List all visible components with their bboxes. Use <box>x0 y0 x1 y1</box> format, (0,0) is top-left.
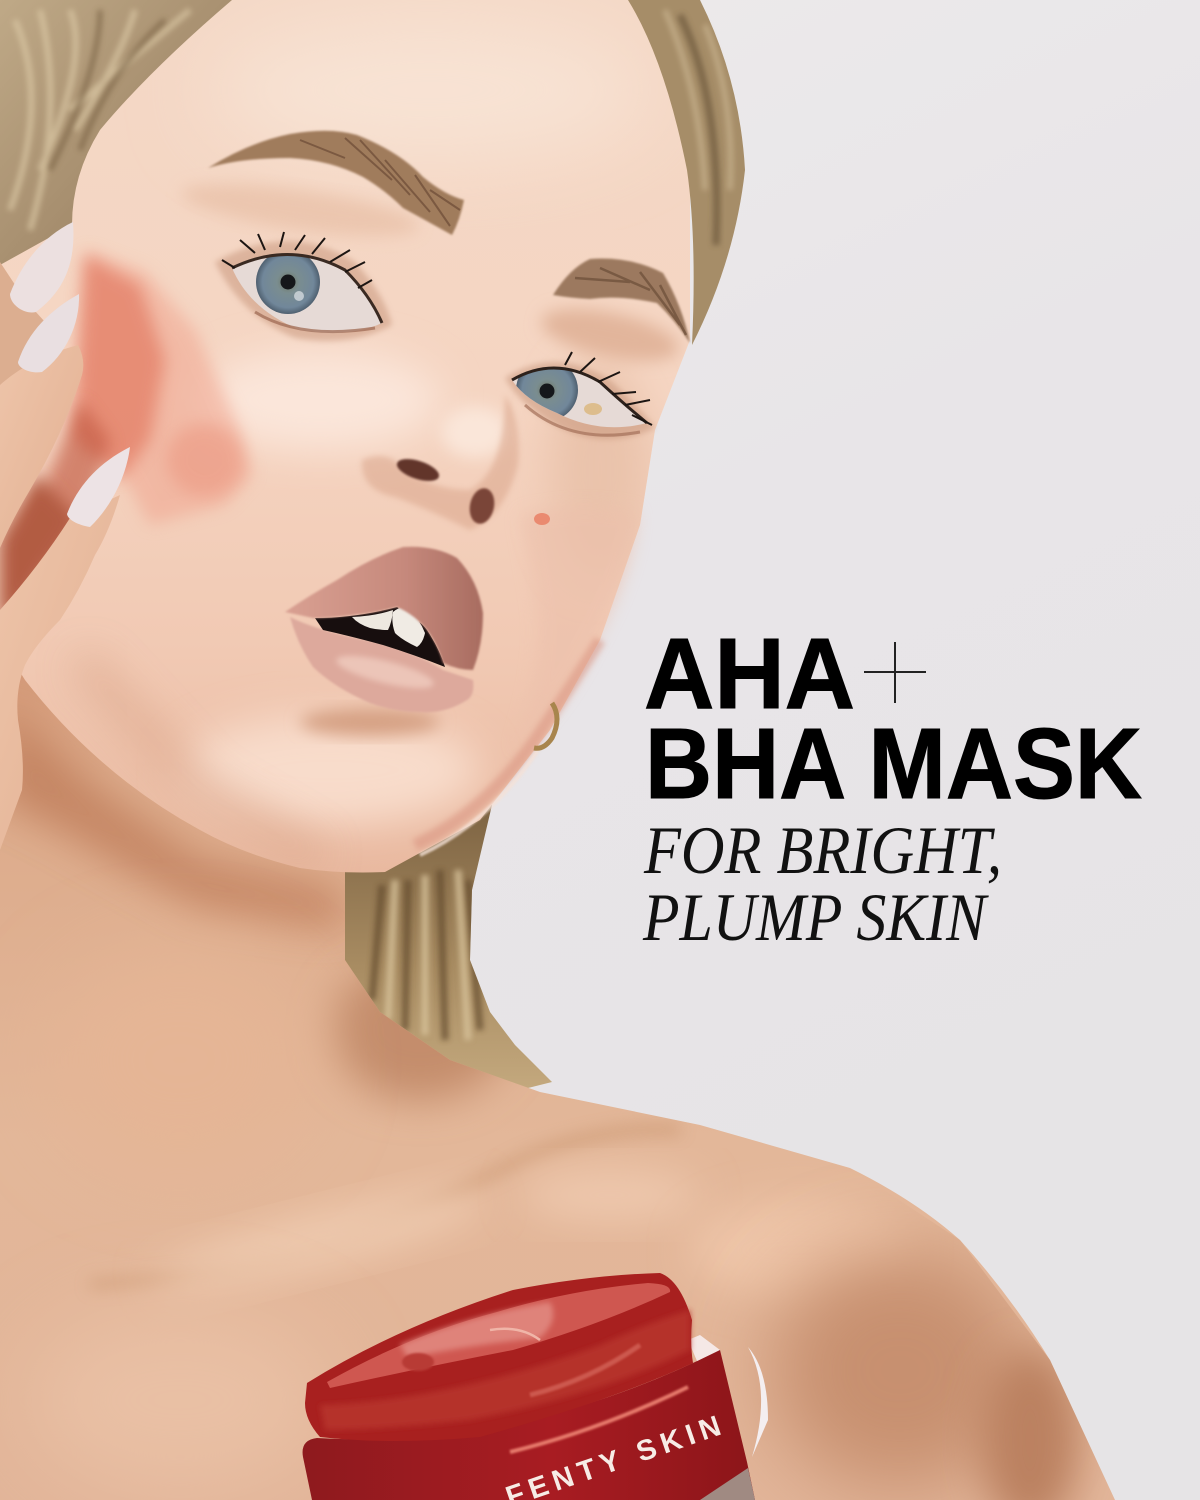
glass lip <box>305 1273 693 1441</box>
face <box>0 0 690 872</box>
eye right <box>505 352 655 439</box>
plus sign <box>864 642 926 703</box>
earring <box>534 703 557 748</box>
eyebrow left <box>208 131 464 235</box>
hair behind neck <box>345 805 552 1088</box>
jar body <box>303 1350 755 1500</box>
nail: middle <box>18 294 79 372</box>
hair top left <box>0 0 232 265</box>
thumbnail behind jar <box>748 1347 768 1457</box>
lips <box>285 547 483 712</box>
lower lip <box>290 617 473 712</box>
hair top right <box>628 0 745 345</box>
cream surface <box>327 1283 670 1388</box>
tooth two <box>392 607 425 647</box>
nail: ring <box>67 447 130 527</box>
tooth one <box>352 610 393 630</box>
finger behind, upper <box>0 262 60 400</box>
eye left <box>215 232 392 341</box>
nail: index <box>10 222 73 313</box>
cream peeking out <box>688 1335 720 1368</box>
middle finger <box>0 345 83 548</box>
shadow between fingers <box>0 475 80 620</box>
title <box>644 618 1142 820</box>
neck, chest and shoulder skin <box>0 600 1115 1500</box>
ring finger <box>0 495 120 850</box>
title: AHA <box>644 618 855 730</box>
hand and fingers with nails <box>0 222 130 850</box>
mouth opening <box>315 607 445 667</box>
eyebrow right <box>553 259 690 343</box>
lit band <box>320 1310 690 1430</box>
product jar <box>303 1273 768 1500</box>
subtitle <box>642 812 1002 955</box>
title: BHA MASK <box>645 708 1142 820</box>
nose <box>362 395 519 530</box>
subtitle: PLUMP SKIN <box>642 879 989 955</box>
mask patch on right cheek and jawline <box>415 507 637 855</box>
red mask patch on left cheek <box>30 250 252 570</box>
subtitle: FOR BRIGHT, <box>643 812 1002 888</box>
upper lip <box>285 547 483 670</box>
